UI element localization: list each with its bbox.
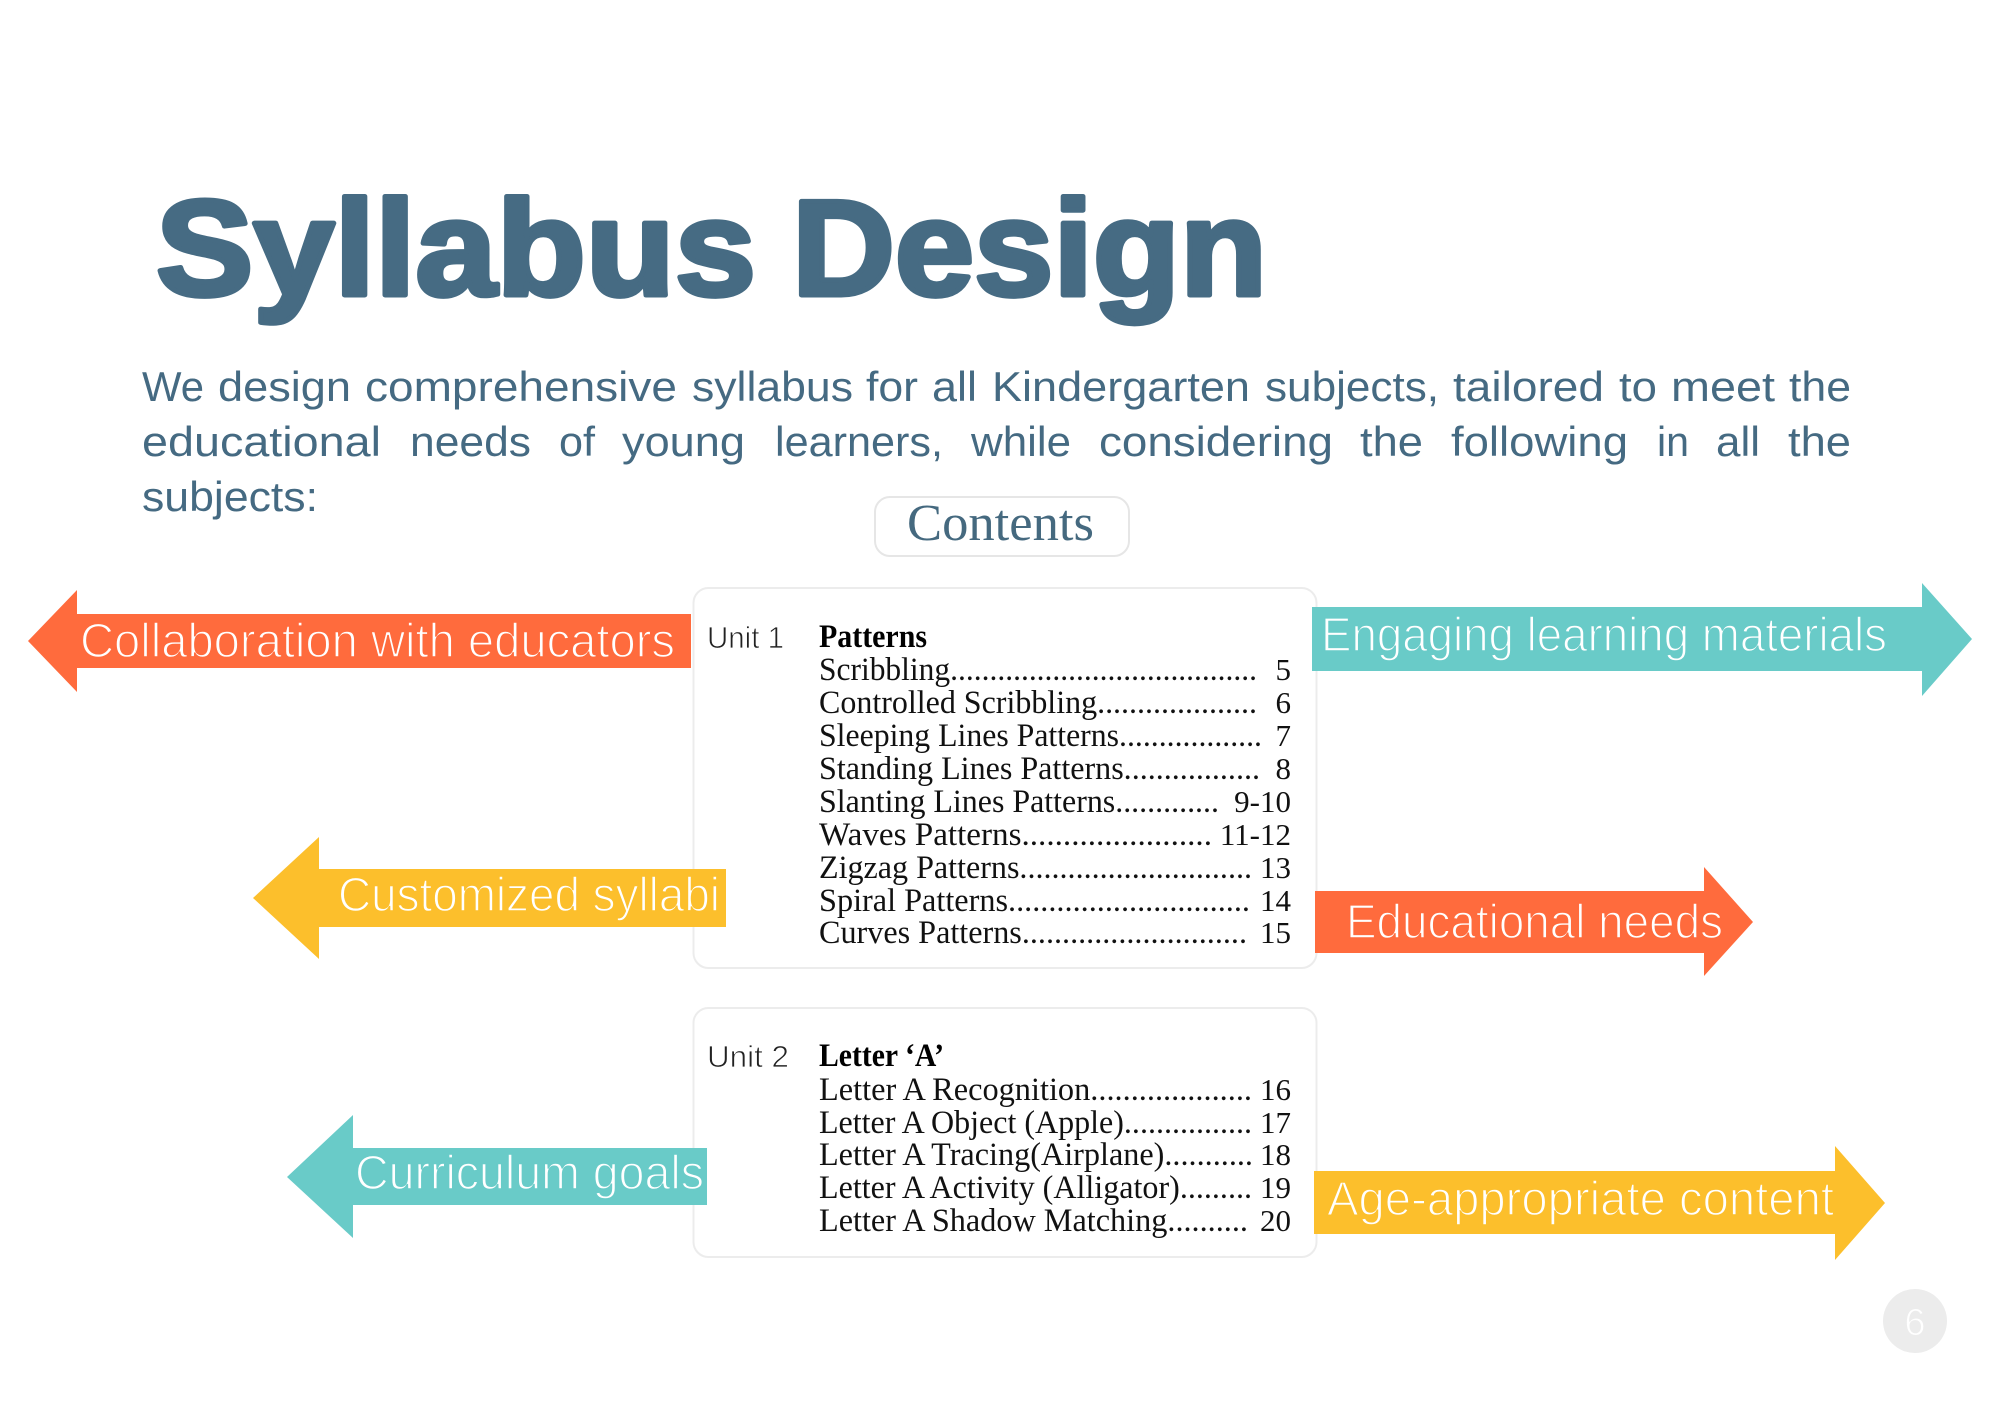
panel: unit 1 contents: Standing Lines Patterns................. [819, 751, 1260, 787]
arrow: educational needs [1315, 867, 1753, 976]
intro text block: meet [1671, 363, 1775, 410]
panel: unit 1 contents: Curves Patterns............................ [819, 915, 1247, 951]
arrow: engaging learning materials [1312, 583, 1972, 696]
intro text block: design [218, 363, 351, 410]
panel: unit 1 contents: 7 [1276, 718, 1291, 753]
intro text block: comprehensive [365, 363, 677, 410]
panel: unit 1 contents: 8 [1276, 751, 1291, 786]
panel: unit 2 contents [694, 1008, 1316, 1257]
intro text block: in [1657, 418, 1689, 465]
panel: unit 1 contents: 13 [1260, 850, 1291, 885]
intro text block: following [1451, 418, 1628, 465]
intro text block: Kindergarten [992, 363, 1250, 410]
panel: unit 2 contents: 17 [1260, 1105, 1291, 1140]
panel: unit 2 contents: Letter A Tracing(Airplane)........... [819, 1137, 1253, 1173]
intro text block: all [1716, 418, 1760, 465]
panel: unit 1 contents: 5 [1276, 652, 1291, 687]
panel: unit 2 contents: 19 [1260, 1170, 1291, 1205]
panel: unit 2 contents: 18 [1260, 1137, 1291, 1172]
arrow: collaboration with educators [28, 590, 691, 692]
arrow: customized syllabi: Customized syllabi [338, 869, 720, 922]
intro text block: syllabus [692, 363, 853, 410]
intro text block: young [622, 418, 745, 465]
panel: unit 1 contents: Controlled Scribbling.................... [819, 685, 1257, 721]
page number badge: 6 [1904, 1302, 1926, 1344]
panel: unit 2 contents: Letter A Object (Apple)................ [819, 1105, 1252, 1141]
intro text block: tailored [1453, 363, 1604, 410]
panel: unit 1 contents: Spiral Patterns.............................. [819, 883, 1250, 919]
panel: unit 1 contents: Slanting Lines Patterns............. [819, 784, 1219, 820]
intro text block: learners, [775, 418, 943, 465]
panel: unit 1 contents [694, 588, 1316, 968]
arrow: curriculum goals: Curriculum goals [355, 1147, 704, 1200]
intro text block: subjects: [142, 473, 318, 520]
panel: unit 2 contents: Letter A Activity (Alligator)......... [819, 1170, 1252, 1206]
page number badge [1883, 1289, 1947, 1353]
intro text block: educational [142, 418, 381, 465]
arrow: age-appropriate content [1314, 1146, 1885, 1260]
intro text block: needs [410, 418, 531, 465]
panel: unit 1 contents: 15 [1260, 915, 1291, 950]
intro text block: considering [1099, 418, 1333, 465]
intro text block: the [1360, 418, 1423, 465]
panel: unit 2 contents: Letter A Recognition.................... [819, 1072, 1252, 1108]
intro text block: while [970, 418, 1071, 465]
panel: unit 2 contents: Unit 2 [707, 1039, 789, 1074]
intro text block: the [1789, 363, 1851, 410]
arrow: educational needs: Educational needs [1346, 896, 1723, 949]
panel: unit 1 contents: Scribbling....................................... [819, 652, 1257, 688]
arrow: age-appropriate content: Age-appropriate content [1327, 1173, 1834, 1226]
panel: unit 1 contents: 11-12 [1220, 817, 1291, 852]
panel: unit 1 contents: 9-10 [1234, 784, 1291, 819]
contents label box: Contents [907, 495, 1094, 552]
intro text block: of [559, 418, 595, 465]
intro text block: all [932, 363, 977, 410]
panel: unit 1 contents: Zigzag Patterns............................. [819, 850, 1252, 886]
panel: unit 1 contents: 14 [1260, 883, 1292, 918]
panel: unit 2 contents: 20 [1260, 1203, 1291, 1238]
title: Design [792, 172, 1267, 324]
arrow: curriculum goals [287, 1115, 707, 1238]
title: Syllabus [156, 172, 756, 324]
panel: unit 2 contents: Letter ‘A’ [819, 1038, 944, 1074]
panel: unit 1 contents: Waves Patterns....................... [819, 817, 1212, 853]
intro text block: We [142, 363, 204, 410]
title [156, 172, 1267, 324]
panel: unit 2 contents: 16 [1260, 1072, 1291, 1107]
panel: unit 1 contents: Unit 1 [707, 620, 784, 655]
panel: unit 1 contents: Sleeping Lines Patterns.................. [819, 718, 1262, 754]
intro text block [142, 363, 1851, 520]
contents label box [875, 495, 1129, 556]
panel: unit 2 contents: Letter A Shadow Matching.......... [819, 1203, 1248, 1239]
arrow: customized syllabi [253, 837, 726, 959]
arrow: collaboration with educators: Collaboration with educators [80, 615, 675, 668]
intro text block: for [866, 363, 918, 410]
panel: unit 1 contents: 6 [1276, 685, 1291, 720]
panel: unit 1 contents: Patterns [819, 619, 927, 655]
intro text block: to [1619, 363, 1657, 410]
intro text block: subjects, [1265, 363, 1439, 410]
intro text block: the [1788, 418, 1851, 465]
arrow: engaging learning materials: Engaging learning materials [1321, 609, 1887, 662]
